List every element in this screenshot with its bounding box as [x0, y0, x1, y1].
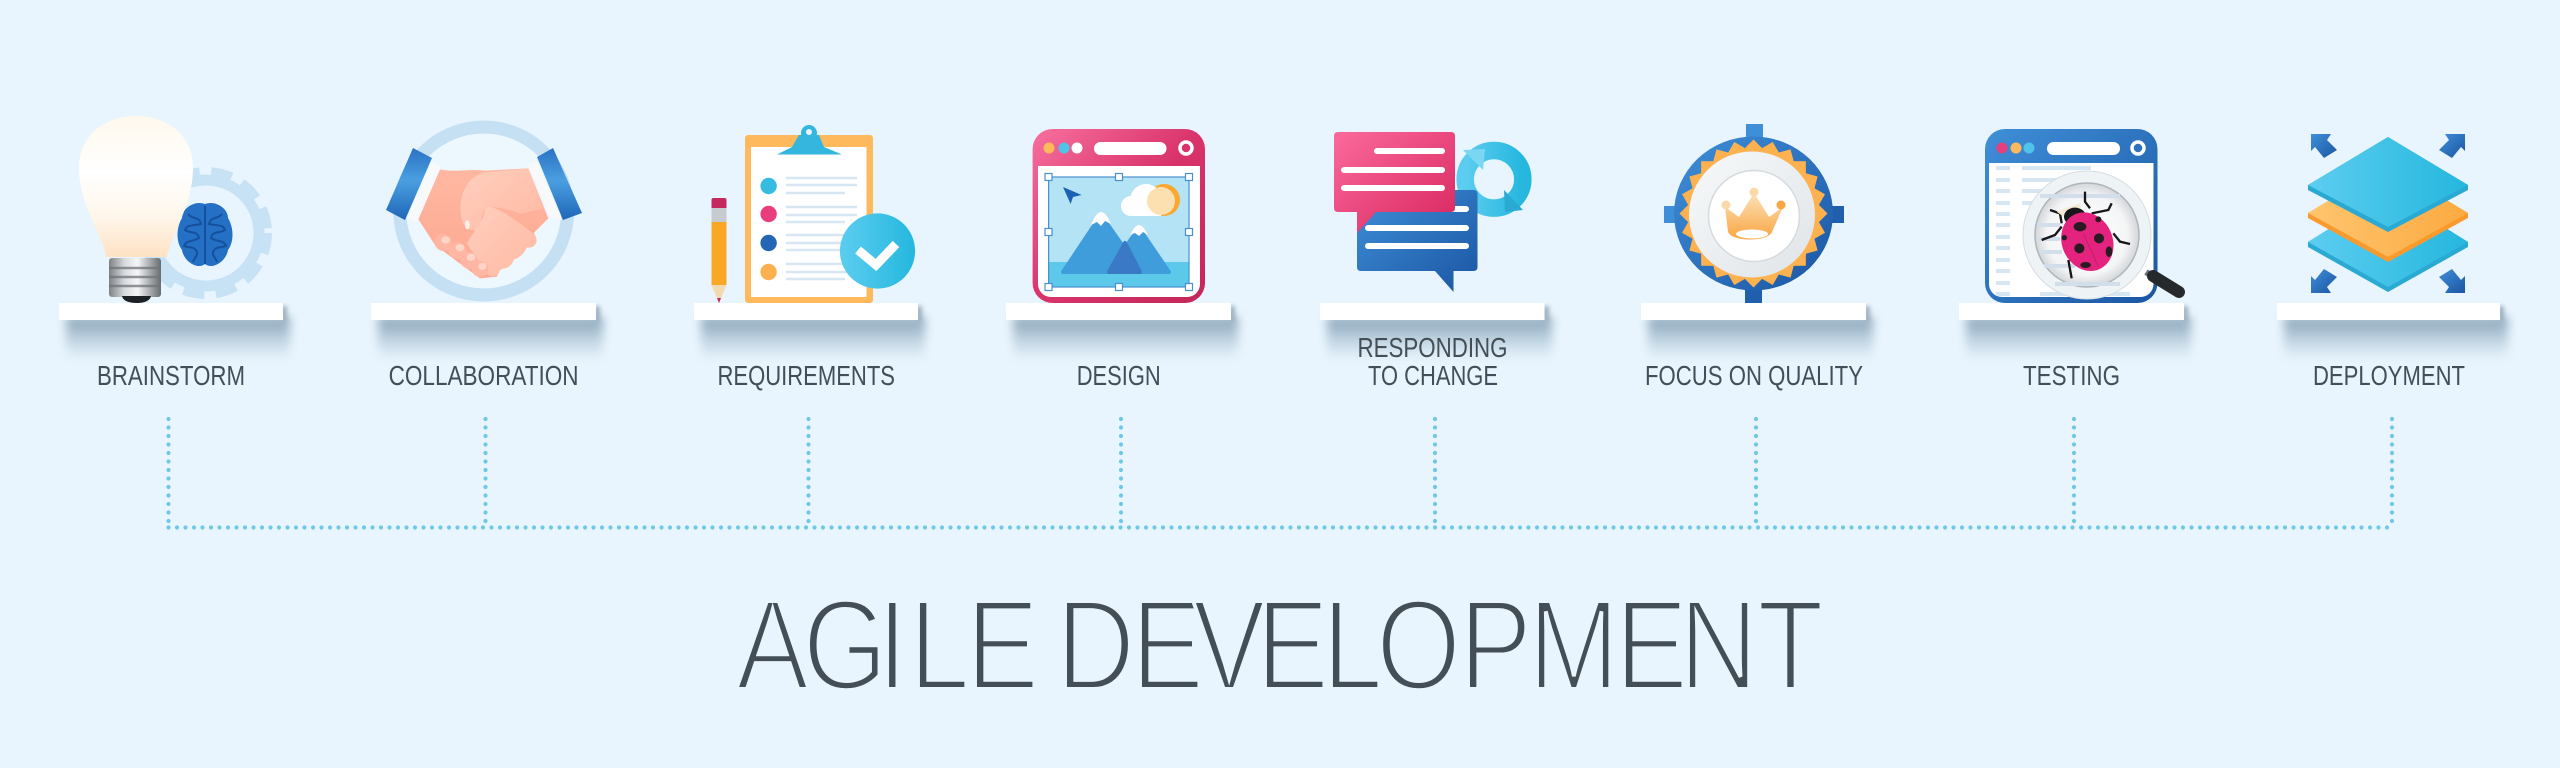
icon: browser window, magnifier and ladybug: [1985, 129, 2179, 303]
shelf shadow: [1327, 306, 1552, 361]
step: requirements: [694, 125, 925, 391]
icon: light bulb and gear with brain: [79, 116, 267, 303]
cursor: [1063, 187, 1082, 204]
badge plate: [1689, 152, 1815, 278]
window body: [1989, 163, 2154, 297]
badge blue disc: [1674, 136, 1833, 290]
paper: [751, 147, 866, 297]
step: deployment: [2277, 134, 2508, 391]
step: focus on quality: [1641, 124, 1873, 391]
label: DEPLOYMENT: [2313, 360, 2465, 391]
wing line: [2083, 233, 2098, 267]
icon: browser design window: [1033, 129, 1205, 303]
window body: [1038, 166, 1200, 297]
fingertips: [431, 231, 491, 280]
shelf shadow: [378, 306, 603, 361]
fingernails: [441, 220, 486, 270]
right cuff: [528, 148, 582, 220]
sun: [1148, 184, 1180, 216]
shelf shadow: [1648, 306, 1873, 361]
middle layer: [2308, 165, 2468, 262]
legs: [2042, 192, 2130, 278]
icon: quality badge with crown: [1664, 124, 1844, 303]
shelf shadow: [2284, 306, 2508, 361]
pink bubble: [1334, 132, 1455, 233]
head markings: [2057, 203, 2082, 217]
label: COLLABORATION: [389, 360, 579, 391]
ring: [400, 127, 568, 295]
gear: [145, 172, 267, 294]
shelf: [1641, 303, 1866, 320]
dotted connector: [168, 419, 2392, 528]
label: TO CHANGE: [1368, 360, 1498, 391]
badge centre: [1708, 170, 1800, 262]
bottom layer: [2308, 192, 2468, 292]
blue bubble: [1357, 190, 1478, 292]
label: BRAINSTORM: [97, 360, 245, 391]
title: AGILE DEVELOPMENT: [736, 574, 1824, 717]
toolbar: [1044, 142, 1192, 155]
cloud: [1121, 184, 1162, 216]
icon: clipboard, pencil and check: [712, 125, 915, 303]
shelf: [2277, 303, 2500, 320]
magnifier lens: [2035, 183, 2139, 287]
badge gold star: [1680, 140, 1828, 288]
body: [2052, 204, 2123, 279]
front hand: [467, 206, 537, 276]
brain: [178, 203, 232, 266]
clipboard board: [745, 135, 873, 303]
hands, drawn in 3x coordinates: [418, 168, 548, 280]
badge knobs: [1664, 124, 1844, 303]
crown: [1722, 188, 1786, 240]
thumb hand: [460, 168, 543, 231]
step: testing: [1959, 129, 2191, 391]
arrows: [2311, 134, 2465, 293]
icon: stacked layers with arrows: [2308, 134, 2468, 293]
shelf: [59, 303, 283, 320]
ladybug, drawn in 3x coordinates: [2042, 192, 2130, 279]
window frame: [1985, 129, 2158, 303]
toolbar: [1996, 142, 2144, 155]
label: FOCUS ON QUALITY: [1645, 360, 1863, 391]
top layer: [2308, 137, 2468, 232]
clip: [777, 125, 842, 154]
spots: [2062, 216, 2112, 268]
bulb socket: [109, 258, 161, 303]
step: responding to change: [1320, 132, 1552, 391]
shelf: [371, 303, 596, 320]
head: [2064, 208, 2086, 226]
checklist dots: [760, 178, 777, 280]
step: brainstorm: [59, 116, 290, 391]
step: design: [1006, 129, 1238, 391]
shelf: [1320, 303, 1544, 320]
label: REQUIREMENTS: [718, 360, 895, 391]
icon: chat bubbles and cycle: [1334, 132, 1523, 292]
shelf shadow: [1966, 306, 2191, 361]
magnifier rim: [2023, 171, 2151, 299]
pencil: [712, 198, 726, 303]
label: TESTING: [2023, 360, 2120, 391]
label: RESPONDING: [1358, 332, 1508, 363]
checklist lines: [786, 178, 857, 279]
shelf: [1959, 303, 2184, 320]
sun front: [1147, 187, 1175, 215]
picture water: [1049, 262, 1189, 287]
cycle arrows: [1463, 149, 1523, 212]
code lines: [1996, 168, 2130, 294]
shelf: [694, 303, 918, 320]
selection box: [1045, 174, 1192, 290]
shelf: [1006, 303, 1231, 320]
check badge: [840, 213, 915, 289]
shelf shadow: [1013, 306, 1238, 361]
picture sky: [1049, 177, 1189, 287]
back hand: [418, 168, 548, 278]
bulb glass: [79, 116, 193, 257]
window frame: [1033, 129, 1205, 303]
step: collaboration: [371, 127, 603, 391]
shelf shadow: [66, 306, 290, 361]
magnifier handle: [2146, 272, 2179, 292]
left cuff: [386, 148, 441, 222]
shelf shadow: [701, 306, 925, 361]
mountains: [1063, 212, 1169, 272]
label: DESIGN: [1077, 360, 1161, 391]
icon: handshake in ring: [386, 127, 582, 295]
